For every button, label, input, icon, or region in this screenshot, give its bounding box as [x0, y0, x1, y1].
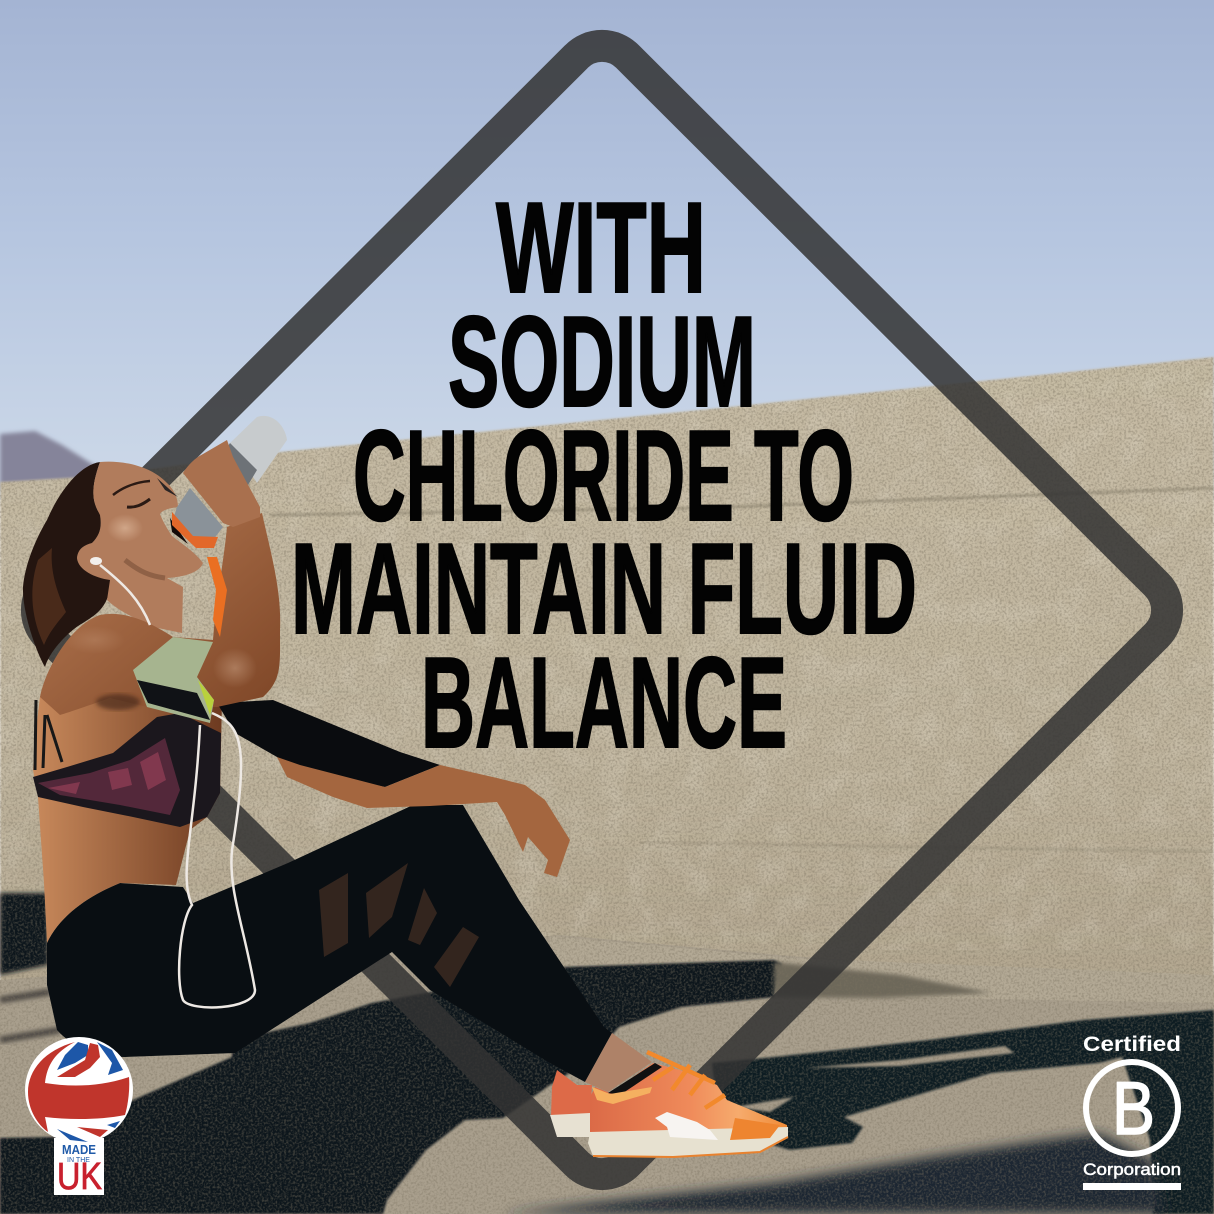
athlete: raised upper arm and shoulder — [40, 513, 280, 715]
long shadow right of the shoe — [712, 1010, 1214, 1214]
athlete: face and neck — [77, 462, 203, 633]
headline: WITH — [496, 176, 706, 320]
logo: certified B corporation — [1083, 1033, 1181, 1190]
athlete: mesh panels — [319, 863, 479, 987]
athlete: arm highlights — [65, 626, 257, 710]
badge: made in the UK: IN THE — [67, 1155, 90, 1164]
logo: underline — [1083, 1183, 1181, 1190]
headline: SODIUM — [448, 290, 756, 434]
athlete: ponytail hair — [23, 462, 110, 667]
logo: corporation word: Corporation — [1083, 1161, 1181, 1179]
athlete: orange strap — [207, 557, 227, 637]
athlete: black sleeve of lower arm — [217, 700, 440, 787]
headline: BALANCE — [421, 631, 787, 775]
athlete: sports bra — [33, 700, 221, 827]
curb shadow trailing right — [774, 962, 991, 998]
athlete: hand holding bottle — [183, 440, 260, 527]
logo: certified word: Certified — [1083, 1033, 1181, 1056]
athlete: earphone cable — [100, 565, 255, 1007]
badge: union flag globe — [28, 1042, 129, 1142]
badge text: MADE — [62, 1143, 96, 1157]
athlete: lower arm and hand — [277, 757, 570, 877]
athlete: facial shading — [107, 478, 188, 578]
athlete: green armband — [133, 637, 214, 723]
athlete: water bottle — [172, 416, 287, 548]
athlete: earbud — [90, 557, 102, 565]
athlete: near running shoe — [588, 1052, 788, 1157]
headline: CHLORIDE TO — [353, 404, 854, 548]
athlete: legs in black leggings — [47, 805, 612, 1082]
texture overlay — [0, 350, 1214, 1214]
badge: made in the UK — [25, 1037, 133, 1198]
light patches in the shadow — [735, 1046, 1014, 1112]
lower foreground shadow — [500, 1133, 1165, 1214]
athlete: ponytail highlight — [32, 548, 66, 645]
logo: circled B: B — [1112, 1066, 1155, 1150]
athlete: torso — [33, 660, 222, 943]
headline — [291, 176, 917, 775]
athlete: ankle — [585, 1033, 652, 1092]
athlete drinking from bottle — [23, 416, 788, 1157]
logo: circled B — [1086, 1062, 1178, 1154]
shadow under curb — [0, 960, 782, 1214]
athlete: far shoe — [550, 1070, 592, 1137]
badge: made in the UK: UK — [57, 1156, 102, 1198]
